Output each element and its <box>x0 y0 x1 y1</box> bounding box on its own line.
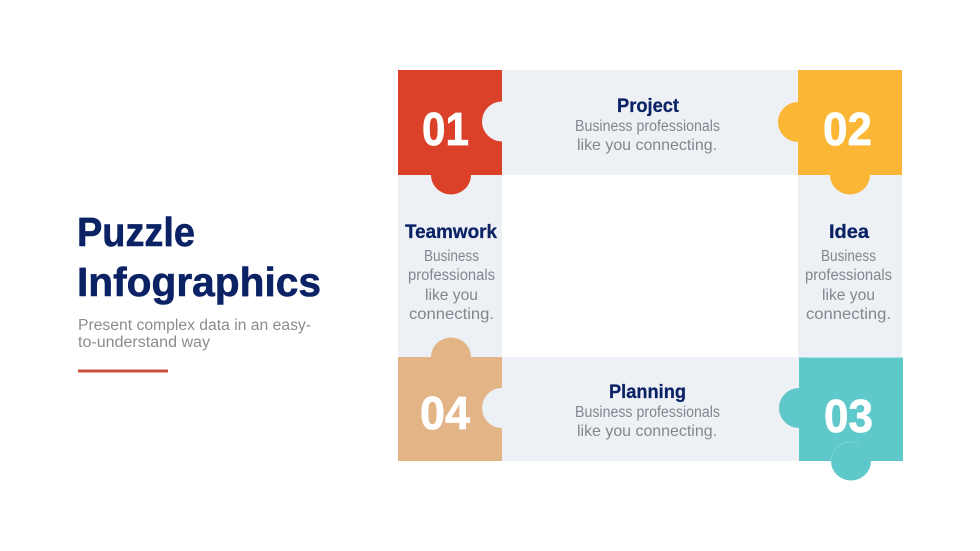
title <box>77 209 321 305</box>
puzzle piece 03 <box>779 358 903 480</box>
title: Infographics <box>77 259 321 305</box>
panel: idea <box>798 175 902 357</box>
panel: idea: connecting. <box>806 306 891 323</box>
panel: planning <box>476 357 806 461</box>
panel: teamwork: professionals <box>408 267 495 284</box>
subtitle: Present complex data in an easy- <box>78 317 311 334</box>
panel: teamwork: connecting. <box>409 306 494 323</box>
panel: idea: professionals <box>805 267 892 284</box>
panel: project: Business professionals <box>575 118 720 135</box>
puzzle piece 01 <box>398 70 502 195</box>
subtitle <box>78 317 311 351</box>
puzzle piece 01: 01 <box>422 103 469 155</box>
panel: teamwork: like you <box>425 287 478 304</box>
panel: project: like you connecting. <box>577 137 717 154</box>
puzzle piece 04 <box>398 338 502 461</box>
panel: planning: like you connecting. <box>577 423 717 440</box>
puzzle piece 02: 02 <box>823 103 872 155</box>
panel: project <box>476 70 806 175</box>
puzzle frame <box>398 70 903 480</box>
puzzle piece 04: 04 <box>420 387 470 439</box>
panel: teamwork <box>398 175 502 357</box>
title: Puzzle <box>77 209 195 255</box>
panel: project: Project <box>617 96 680 117</box>
puzzle piece 03: 03 <box>824 390 873 442</box>
panel: planning: Planning <box>609 382 686 403</box>
panel: idea: Business <box>821 248 876 265</box>
puzzle piece 02 <box>778 70 902 195</box>
panel: idea: Idea <box>829 222 869 243</box>
left title block <box>77 209 321 372</box>
panel: idea: like you <box>822 287 875 304</box>
subtitle: to-understand way <box>78 334 210 351</box>
accent rule <box>78 370 168 372</box>
panel: teamwork: Teamwork <box>405 222 497 243</box>
panel: teamwork: Business <box>424 248 479 265</box>
panel: planning: Business professionals <box>575 404 720 421</box>
